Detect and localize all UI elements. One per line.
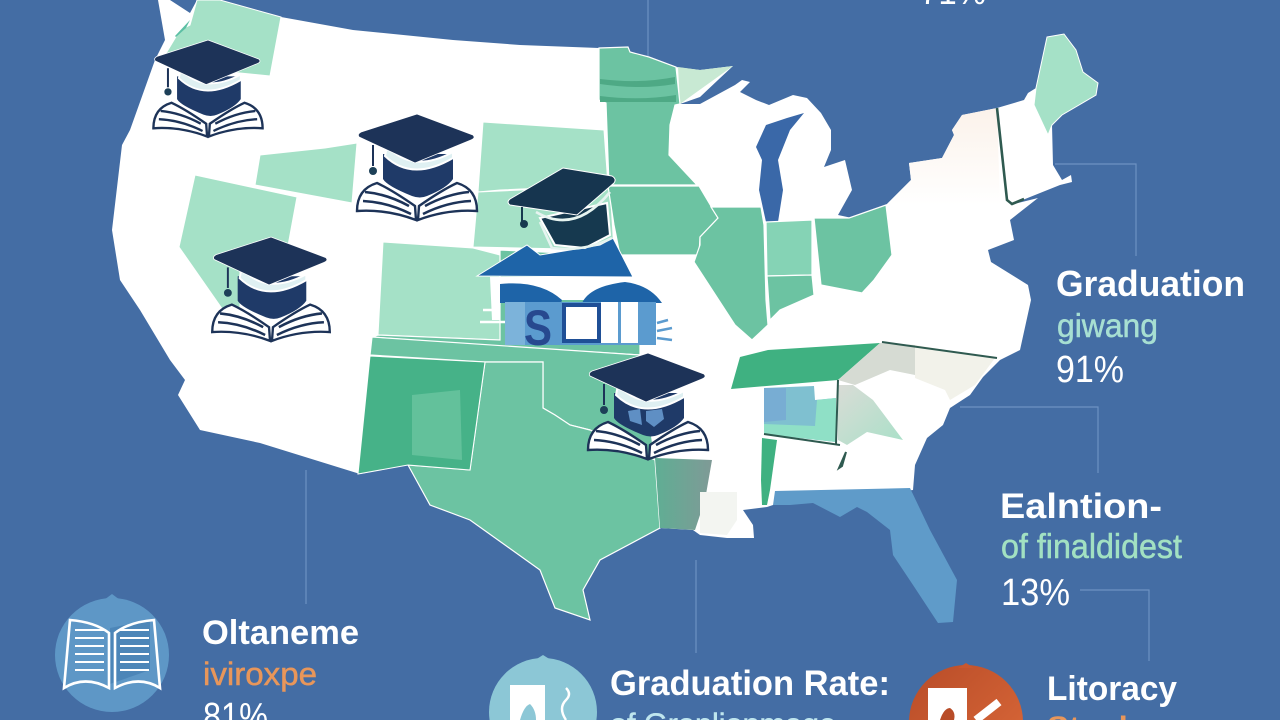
icon: graduation cap and book, Wyoming xyxy=(357,114,477,220)
window xyxy=(564,305,599,341)
mainland silhouette xyxy=(112,0,1098,620)
New Mexico xyxy=(358,356,485,474)
side roofs xyxy=(500,282,662,303)
Puget sound accent xyxy=(175,20,190,37)
Indiana xyxy=(766,220,812,276)
lighter wall xyxy=(505,302,525,345)
medium green states xyxy=(370,47,892,620)
icon: open book badge xyxy=(55,594,169,712)
heading: Ealntion- xyxy=(1000,487,1162,526)
main roof xyxy=(477,238,633,277)
dark state border lines xyxy=(764,108,1024,468)
white panels xyxy=(601,302,638,343)
stat: Graduation right xyxy=(1056,263,1245,391)
building body xyxy=(505,302,656,345)
leader lines xyxy=(306,0,1149,661)
icon: graduation cap and book, Oklahoma xyxy=(588,353,708,459)
heading: Graduation xyxy=(1056,263,1245,304)
value: 13% xyxy=(1001,572,1070,614)
sublabel: of finaldidest xyxy=(1001,528,1183,566)
Lake Michigan xyxy=(756,113,804,222)
southern Indiana xyxy=(767,275,814,320)
New York xyxy=(886,108,1000,205)
icon: large graduation cap on schoolhouse xyxy=(508,168,615,249)
white eave xyxy=(490,277,640,320)
left motion lines xyxy=(480,310,505,322)
Alabama blue block xyxy=(764,388,786,422)
icon: graduation cap and book, Nevada xyxy=(212,237,330,341)
Michigan upper peninsula xyxy=(678,66,733,104)
motion lines xyxy=(657,320,672,340)
door letter: S xyxy=(524,300,552,356)
stat: Oltaneme xyxy=(202,614,359,720)
stat: Ealntion right xyxy=(1000,487,1183,614)
Georgia wedge xyxy=(838,385,903,445)
mint lower band xyxy=(764,398,836,442)
sublabel: iviroxpe xyxy=(203,656,317,692)
stat: Litoracy xyxy=(1047,670,1177,720)
sublabel: giwang xyxy=(1057,307,1158,344)
icon: graduation cap and book, Pacific Northwest xyxy=(153,40,263,136)
Florida xyxy=(773,488,957,623)
heading: Litoracy xyxy=(1047,670,1177,708)
heading: Graduation Rate: xyxy=(610,664,890,703)
Mississippi band xyxy=(764,386,836,442)
Minnesota stripes xyxy=(600,77,676,102)
Tennessee xyxy=(731,343,880,389)
icon: schoolhouse xyxy=(477,238,672,356)
heading: Oltaneme xyxy=(202,614,359,652)
New Mexico shading xyxy=(412,390,462,460)
icon: certificate badge xyxy=(489,655,597,720)
North Carolina off-white xyxy=(915,345,995,400)
Louisiana xyxy=(700,492,737,535)
icon: literacy badge xyxy=(909,663,1023,720)
value: 91% xyxy=(1056,349,1124,391)
map of the United States xyxy=(112,0,1098,623)
stat: Graduation Rate xyxy=(610,664,890,720)
Carolinas grey xyxy=(838,343,915,385)
green sliver xyxy=(761,438,777,505)
light mint states xyxy=(165,0,1098,340)
Arkansas xyxy=(655,458,712,530)
